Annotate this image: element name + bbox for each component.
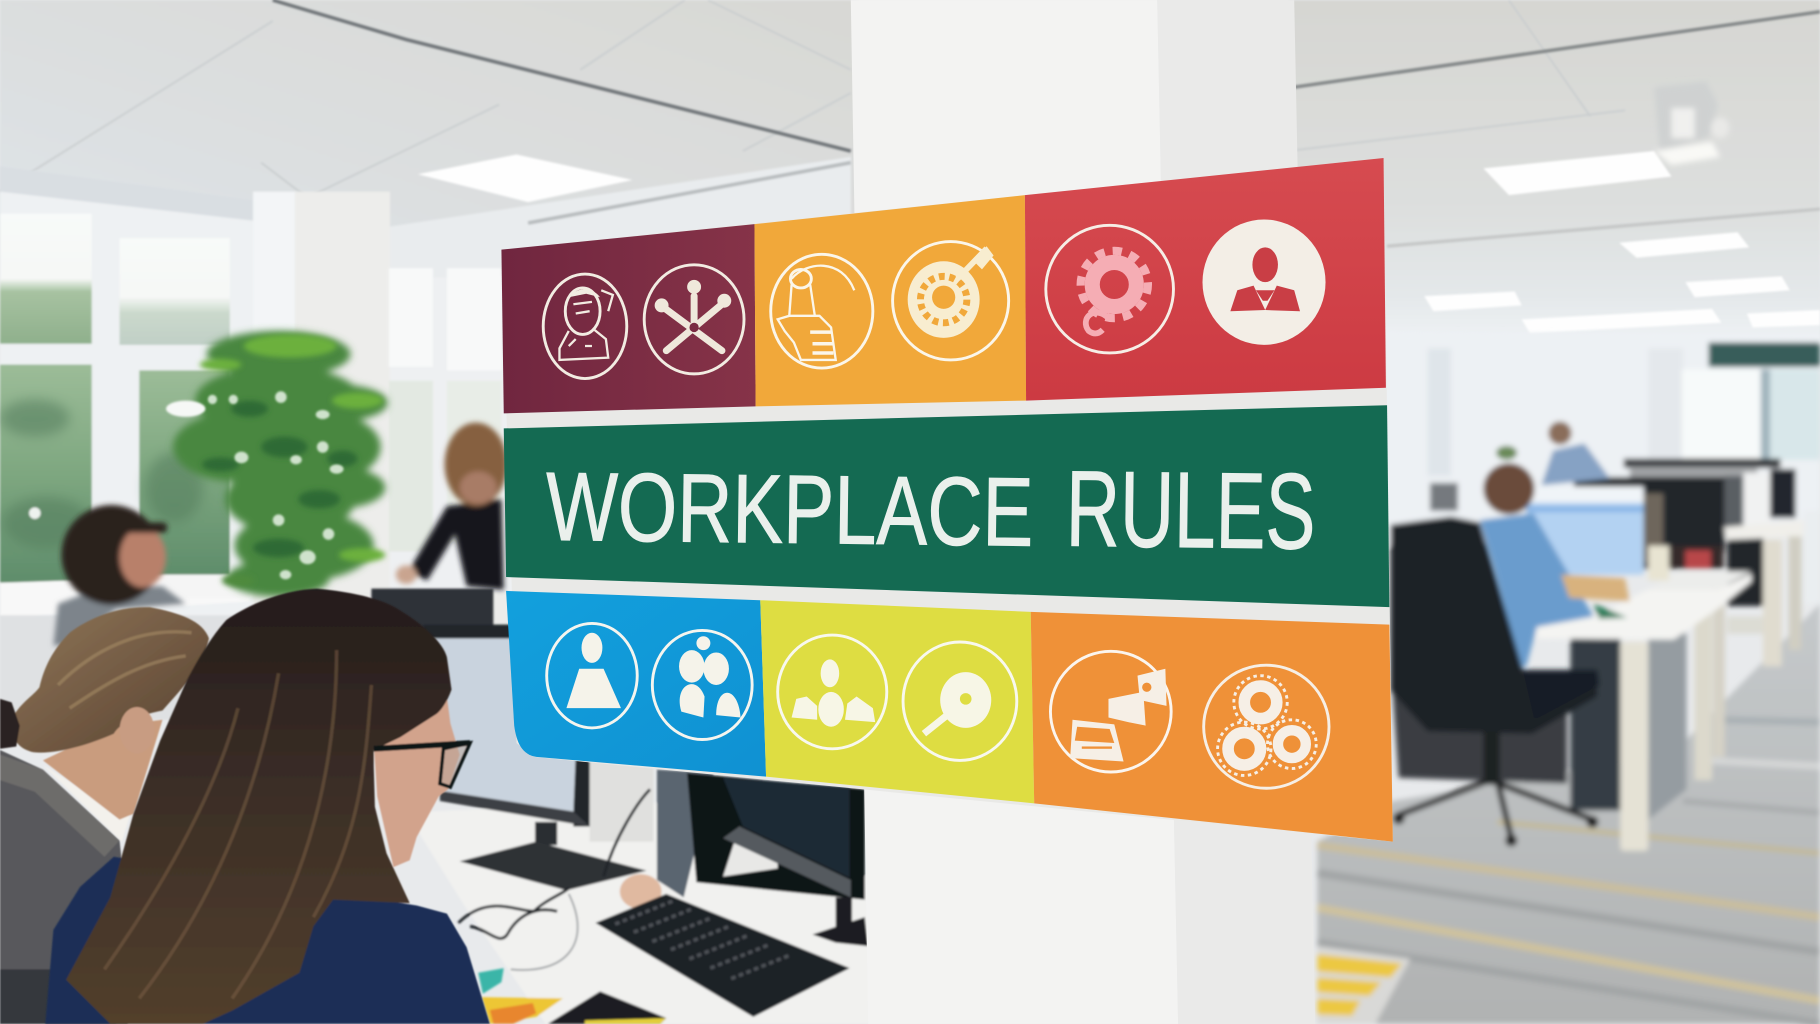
monitor left	[371, 589, 647, 890]
background: ceiling	[0, 0, 1820, 348]
icon: hooded worker	[543, 274, 627, 379]
background woman at window	[53, 505, 186, 645]
window panes	[0, 214, 230, 583]
right desk and cabinet	[1537, 571, 1752, 851]
floor yellow markings	[1317, 946, 1410, 1024]
panel: red	[1025, 158, 1386, 401]
face	[374, 697, 460, 867]
foreground woman with long brown hair and navy jacket	[45, 589, 490, 1024]
background: left windows and walls	[0, 157, 854, 720]
panel: orange	[1031, 612, 1393, 842]
background: right office, floor and staff	[1294, 331, 1820, 1024]
keyboard	[595, 894, 850, 1017]
sign: workplace rules	[501, 158, 1393, 842]
panel: amber	[754, 195, 1026, 406]
glasses	[374, 743, 470, 787]
office chair with jacket	[1391, 517, 1599, 846]
cables	[458, 789, 650, 970]
icon: single person	[547, 623, 637, 728]
icon: magnifier with chart	[903, 642, 1017, 760]
monitor right	[657, 770, 868, 946]
seated man and monitor	[1480, 463, 1669, 666]
long hair	[66, 589, 452, 1024]
icon: person in filled circle	[1202, 220, 1326, 345]
plant	[166, 331, 388, 597]
panel: blue	[506, 591, 766, 777]
title text second word: RULES	[1065, 448, 1316, 572]
icon: laptop and documents	[1050, 651, 1171, 772]
icon: ring with handle	[893, 242, 1009, 360]
desk with computers	[371, 589, 882, 1024]
icon: crossed tools	[644, 265, 744, 374]
foreground woman with bun and grey jacket	[0, 607, 209, 1024]
icon: gear and hook	[1046, 225, 1173, 353]
distant desks and monitors	[1574, 459, 1820, 666]
bottom colour band	[506, 591, 1393, 842]
top colour band	[501, 158, 1386, 413]
icon: hand gripping	[771, 254, 873, 368]
standing man	[1430, 421, 1610, 511]
hand	[620, 874, 662, 909]
pillar	[851, 0, 1315, 1024]
panel: maroon	[501, 224, 756, 413]
navy jacket	[45, 857, 490, 1024]
ceiling beams and lights	[273, 0, 1820, 333]
ceiling fixture	[1654, 81, 1729, 165]
panel: yellow	[760, 600, 1034, 803]
background woman in black	[396, 423, 507, 590]
icon: group of people	[652, 630, 752, 740]
desk stationery	[478, 968, 666, 1024]
title band	[504, 405, 1389, 607]
title text: WORKPLACE	[545, 452, 1034, 567]
icon: team with leader	[778, 635, 887, 749]
icon: three interlocking gears	[1204, 665, 1329, 788]
